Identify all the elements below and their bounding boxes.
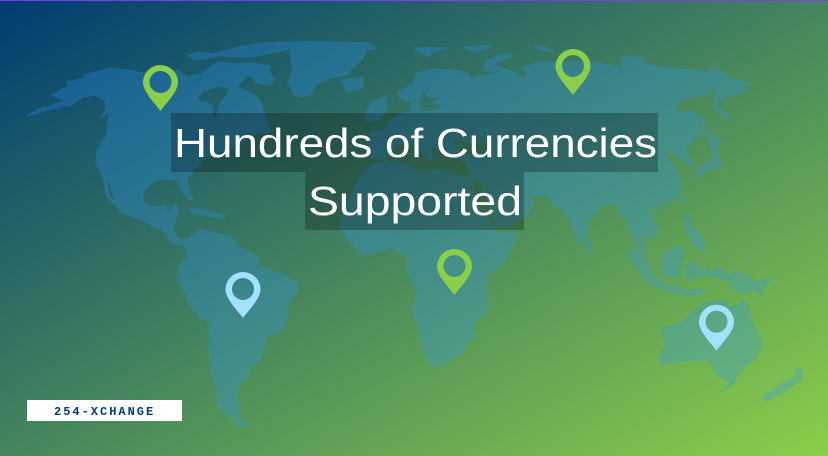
title: second line highlight (305, 172, 524, 230)
pin: Asia (556, 49, 590, 95)
Sulawesi and New Guinea (686, 261, 772, 297)
Australia (660, 299, 762, 391)
North America (27, 62, 297, 425)
Arctic islands (414, 46, 552, 72)
title (174, 120, 657, 224)
Borneo (661, 246, 684, 278)
brand label (27, 400, 182, 421)
Philippines (680, 197, 705, 250)
pin: North America (143, 65, 178, 111)
Sri Lanka (586, 238, 592, 252)
Africa (340, 161, 515, 368)
New Zealand (762, 368, 802, 401)
Greenland and Ellesmere (188, 42, 375, 97)
pin: Australia (699, 305, 734, 351)
pin: Africa (437, 249, 472, 295)
Iceland (342, 78, 363, 92)
title: first line highlight (171, 113, 658, 172)
brand label: 254-XCHANGE (54, 405, 155, 419)
title: Supported (308, 178, 522, 224)
Cuba (190, 208, 226, 218)
Eurasia (368, 57, 754, 295)
pin: South America (226, 272, 260, 318)
title: Hundreds of Currencies (174, 120, 657, 166)
United Kingdom (365, 96, 387, 122)
world map (27, 42, 802, 425)
top accent bar (0, 0, 828, 1)
